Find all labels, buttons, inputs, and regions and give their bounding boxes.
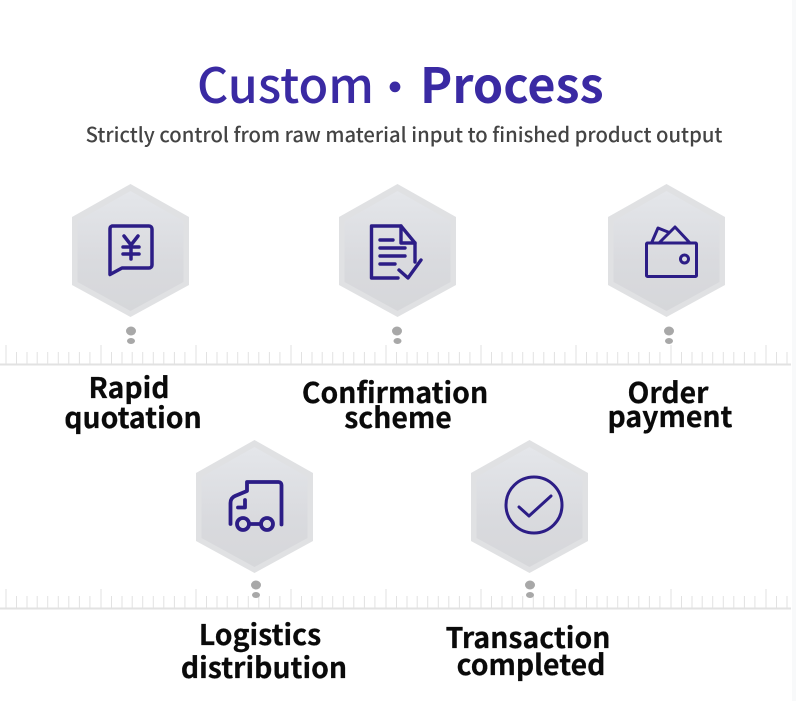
connector dots — [251, 580, 261, 598]
label: Order — [627, 371, 709, 412]
hexagon badge — [196, 440, 313, 573]
step: confirmation scheme — [302, 184, 488, 437]
subtitle: Strictly control from raw material input to finished product output — [86, 119, 722, 148]
label: Rapid — [88, 366, 170, 407]
connector dots — [392, 326, 402, 344]
icon: document with check — [372, 226, 421, 278]
title: · — [374, 55, 416, 116]
label: payment — [608, 395, 733, 436]
label: quotation — [64, 396, 202, 437]
label: distribution — [181, 646, 347, 687]
hexagon badge — [72, 184, 189, 317]
title: Custom — [197, 47, 374, 117]
connector dots — [126, 326, 136, 344]
step: order payment — [608, 184, 733, 436]
icon: yen speech bubble — [110, 226, 152, 274]
hexagon badge — [608, 184, 725, 317]
ruler: row one — [0, 345, 791, 364]
step: rapid quotation — [64, 184, 202, 437]
title: Process — [420, 47, 604, 117]
label: scheme — [344, 396, 452, 437]
ruler: row two — [0, 589, 791, 608]
title — [197, 47, 604, 117]
icon: wallet — [646, 227, 696, 276]
step: transaction completed — [446, 440, 610, 684]
connector dots — [525, 580, 535, 598]
step: logistics distribution — [181, 440, 347, 687]
icon: delivery truck — [230, 482, 282, 530]
label: Logistics — [199, 613, 321, 654]
label: Confirmation — [302, 371, 488, 412]
hexagon badge — [339, 184, 456, 317]
label: completed — [457, 643, 605, 684]
connector dots — [664, 326, 674, 344]
icon: check circle — [506, 477, 562, 533]
hexagon badge — [471, 440, 588, 573]
label: Transaction — [446, 616, 610, 657]
